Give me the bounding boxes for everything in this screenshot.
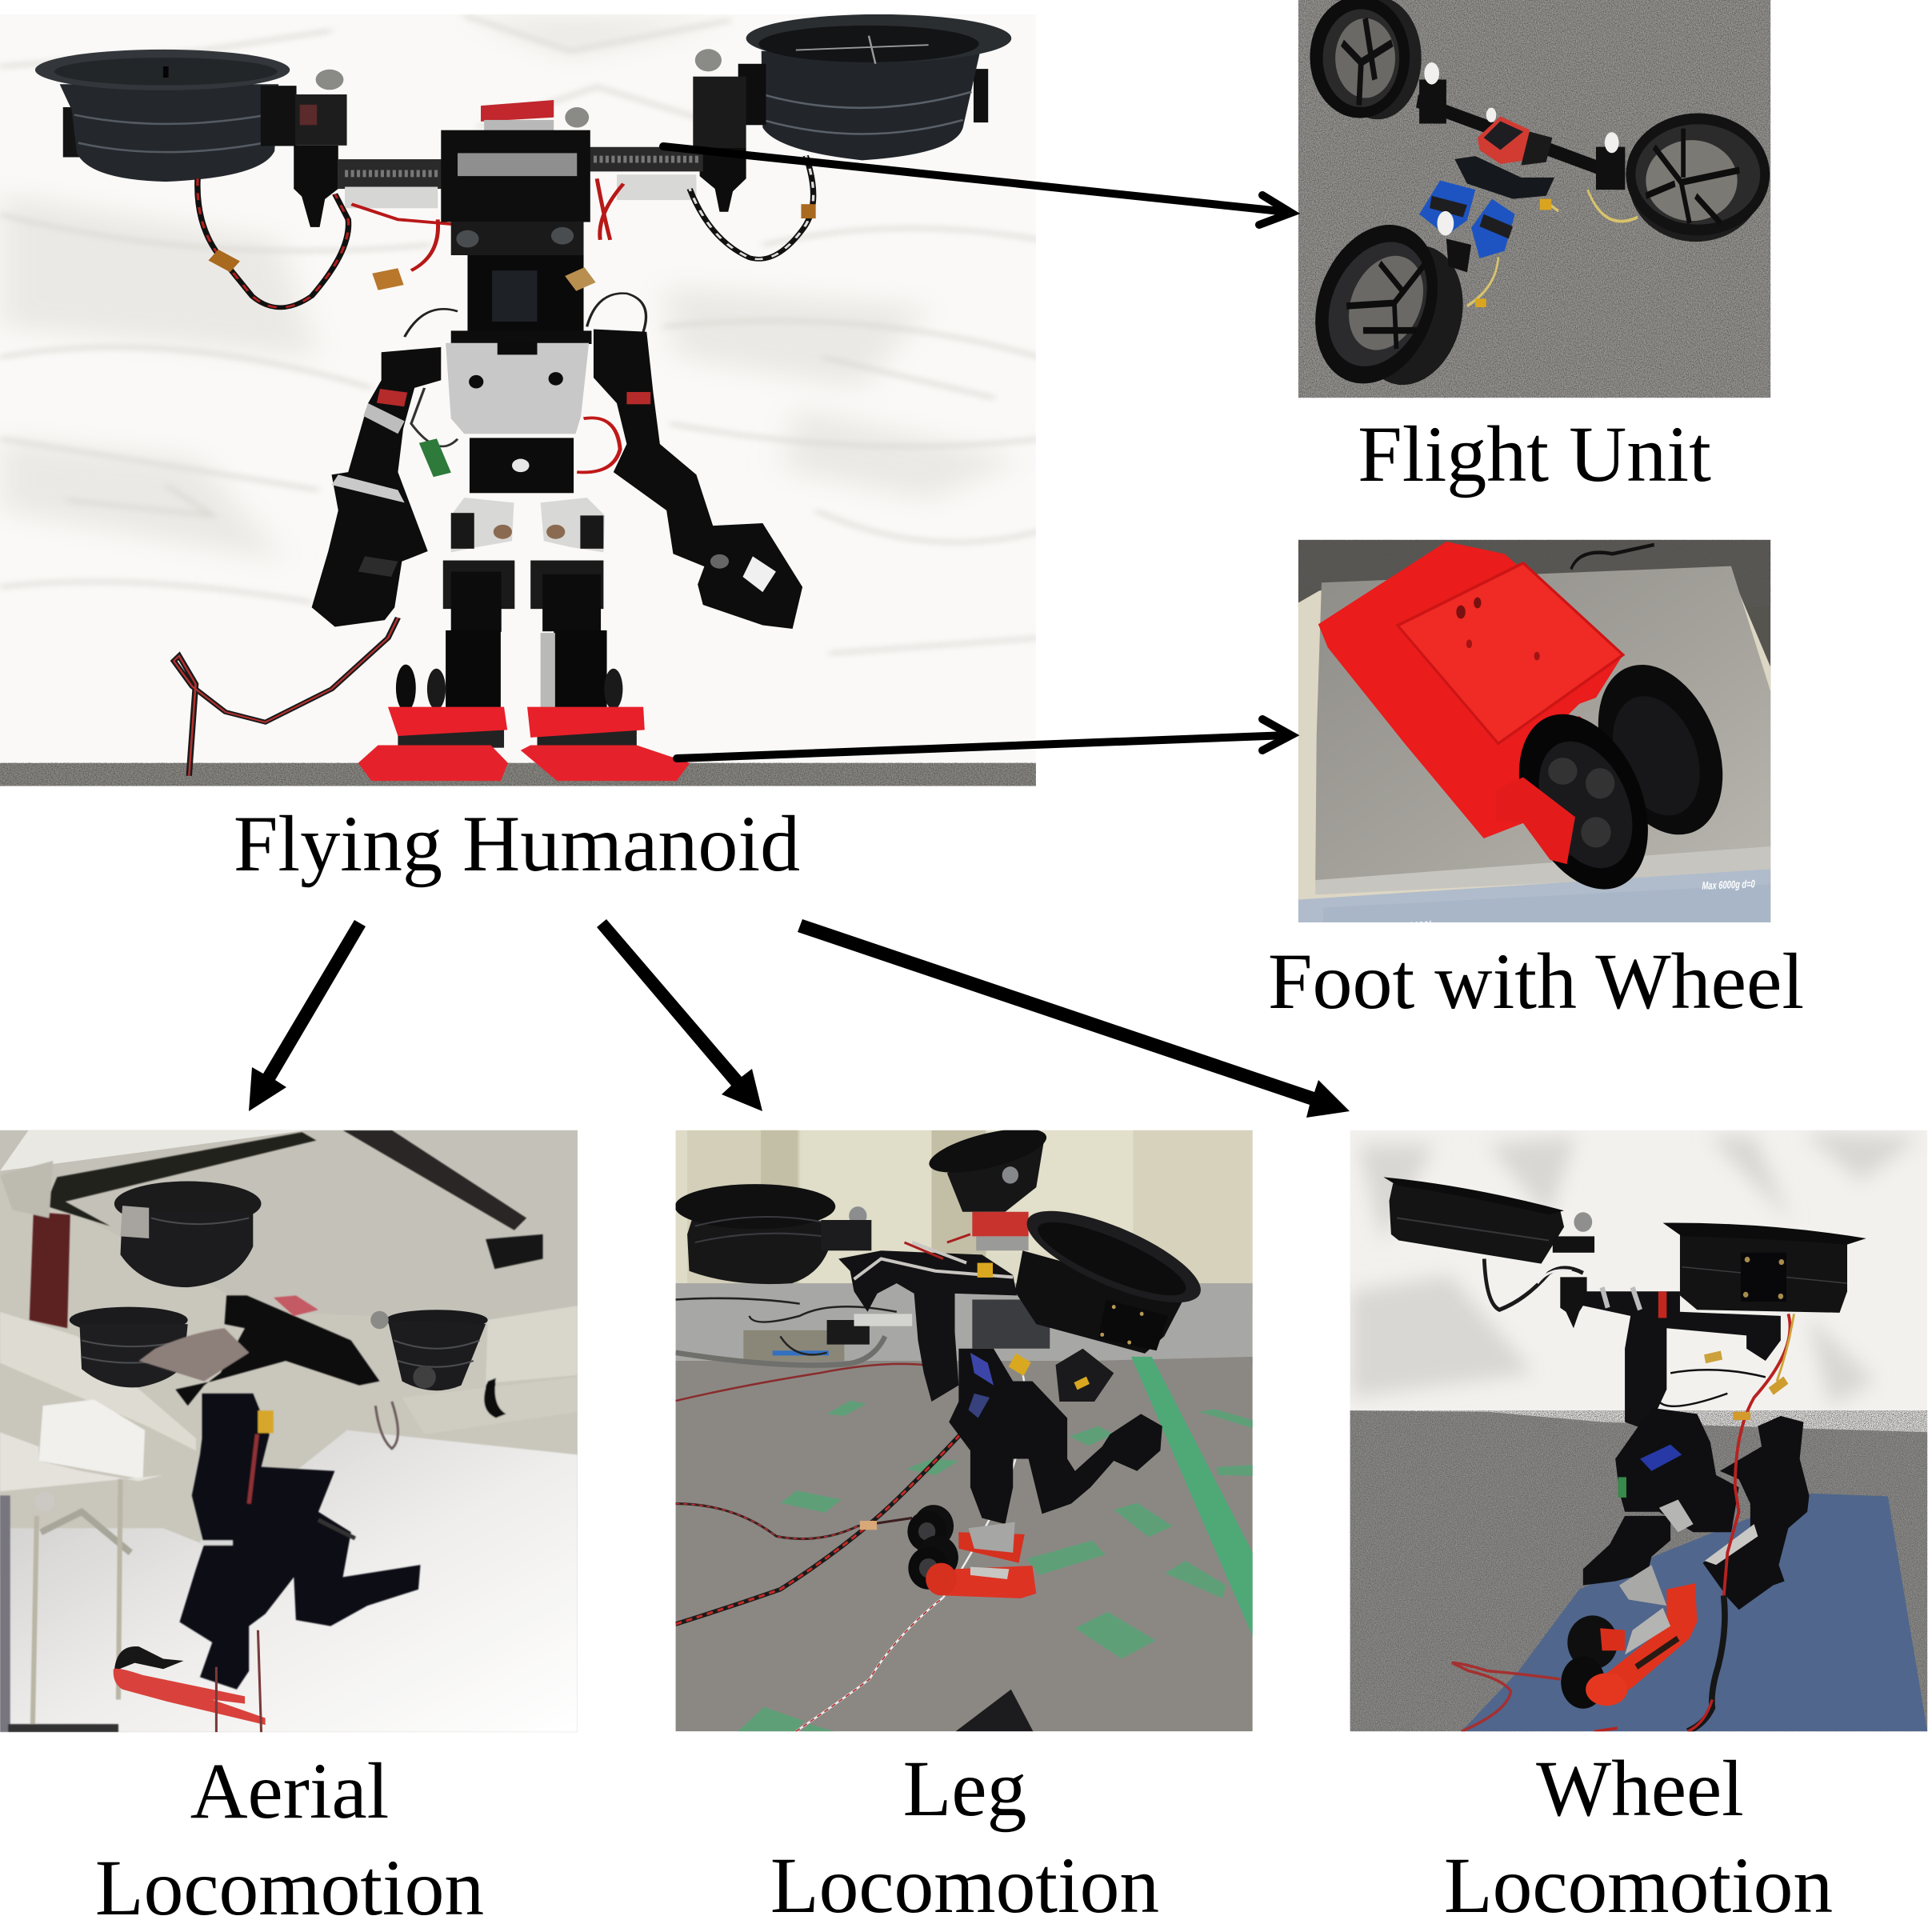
heading: Wheel Locomotion: [1444, 1744, 1833, 1928]
photo: flying humanoid robot: [0, 14, 1040, 786]
front ducted fan: [1015, 1193, 1210, 1354]
left ducted fan: [675, 1184, 871, 1284]
robot torso and limbs: [949, 1349, 1162, 1524]
left ducted fan: [35, 50, 347, 227]
red foot tray: [1318, 542, 1648, 863]
weighing scale: AND: [1340, 919, 1364, 938]
rear wheel: [1576, 630, 1745, 870]
controller: [972, 1212, 1029, 1250]
duct: lower left: [1315, 225, 1463, 386]
heading: Flight Unit: Flight Unit: [1358, 410, 1711, 498]
weighing scale: EK-6100i: [1392, 919, 1431, 936]
arrow: to aerial locomotion: [249, 920, 366, 1111]
duct: right: [1626, 114, 1770, 242]
robot arm and gripper: [1702, 1416, 1809, 1610]
photo: aerial locomotion: [0, 1130, 578, 1732]
photo: leg locomotion: [675, 1120, 1253, 1731]
equipment at left edge: [0, 1479, 130, 1732]
ceiling beams: [0, 1130, 578, 1491]
heading: Wheel Locomotion: Locomotion: [1444, 1841, 1833, 1928]
heading: Leg Locomotion: Leg: [903, 1744, 1026, 1833]
photo: wheel locomotion: [1350, 1130, 1927, 1731]
white curtain: [0, 1430, 578, 1732]
grey carpet: [1350, 1410, 1927, 1731]
torso details and wires: [1618, 1314, 1794, 1606]
red feet: [358, 707, 690, 781]
grey floor mat: [676, 1357, 1253, 1731]
top ducted fan: [114, 1182, 262, 1287]
photo: flight unit: [1296, 0, 1770, 415]
arrow: to leg locomotion: [597, 919, 762, 1111]
tether wires: [676, 1364, 1026, 1731]
arm frame: [1583, 1287, 1781, 1430]
rear ducted fan: [926, 1120, 1050, 1212]
robot leg: [1583, 1516, 1670, 1586]
arm bar and wires: [198, 147, 816, 307]
right ducted fan: [693, 14, 1011, 212]
tablet: [955, 1690, 1033, 1731]
heading: Wheel Locomotion: Wheel: [1536, 1744, 1744, 1833]
left ducted fan: [70, 1307, 188, 1387]
front wheel: [1496, 678, 1671, 926]
robot torso: [1615, 1408, 1739, 1532]
arrow: humanoid foot to foot with wheel: [677, 719, 1291, 758]
heading: Leg Locomotion: Locomotion: [770, 1841, 1159, 1928]
red wheel arm: [1496, 778, 1575, 864]
robot body: [138, 1295, 421, 1690]
photo: foot with wheel: [1298, 540, 1770, 938]
right arm and gripper: [594, 330, 802, 629]
frame, batteries and controller: [1418, 62, 1638, 307]
right ducted fan: [1663, 1223, 1866, 1313]
heading: Flying Humanoid: Flying Humanoid: [234, 799, 800, 888]
heading: Aerial Locomotion: [95, 1746, 484, 1928]
right ducted fan: [370, 1310, 488, 1390]
tether wire: [174, 618, 398, 776]
heading: Aerial Locomotion: Aerial: [190, 1746, 389, 1835]
weighing scale: Max 6000g d=0: [1702, 878, 1755, 892]
arm and frame: [838, 1234, 1050, 1402]
blue mat: [1462, 1494, 1927, 1731]
head block: [405, 100, 646, 339]
wheels and red foot: [1561, 1583, 1697, 1709]
arrow: humanoid arm to flight unit: [663, 146, 1291, 225]
hanging cable: [1452, 1595, 1725, 1731]
left arm and gripper: [312, 347, 441, 626]
duct: top left: [1310, 0, 1422, 119]
servo labels and gripper details: [331, 389, 776, 592]
legs: [396, 498, 622, 711]
weighing scale: [1298, 566, 1770, 938]
left ducted fan: [1383, 1177, 1594, 1328]
heading: Foot with Wheel: Foot with Wheel: [1268, 937, 1804, 1026]
arrow: to wheel locomotion: [798, 919, 1350, 1118]
green floor tape: [738, 1357, 1253, 1731]
heading: Leg Locomotion: [770, 1744, 1159, 1928]
torso, chest plate: [411, 330, 620, 493]
wheels and red foot: [114, 1630, 266, 1732]
wheels and red foot: [907, 1505, 1036, 1598]
